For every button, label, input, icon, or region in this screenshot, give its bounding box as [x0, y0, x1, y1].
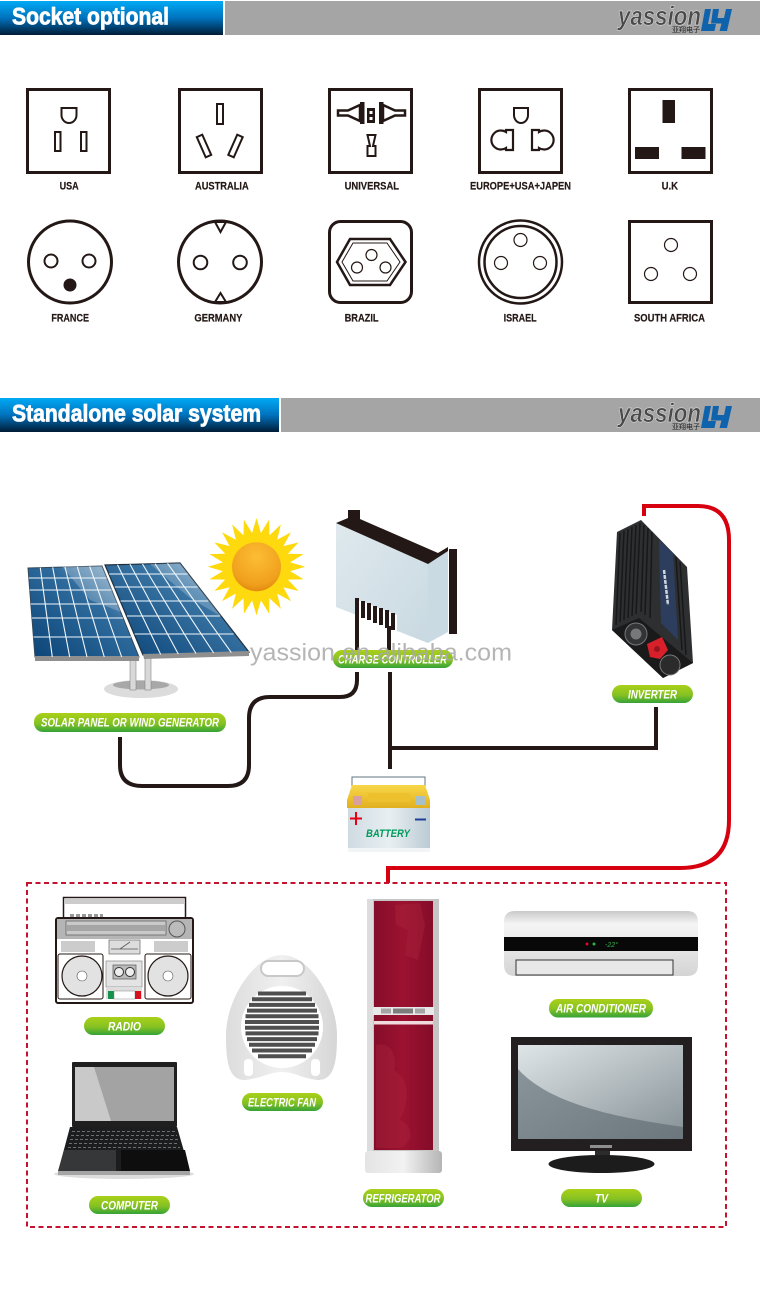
label: computer: COMPUTER — [101, 1200, 159, 1212]
panel: socket types row 2 — [28, 220, 712, 324]
label: computer — [89, 1196, 170, 1214]
socket: USA — [28, 90, 110, 192]
wire: controller to battery and inverter — [390, 672, 656, 769]
label: solar panel or wind generator — [34, 713, 226, 732]
icon: electric fan — [226, 955, 337, 1080]
label: refrigerator — [363, 1189, 444, 1207]
wire: solar panel to controller — [120, 672, 357, 786]
label: refrigerator: REFRIGERATOR — [366, 1194, 441, 1206]
socket: Australia — [180, 90, 262, 192]
icon: inverter — [612, 520, 693, 678]
icon: battery: BATTERY — [366, 828, 411, 840]
icon: air conditioner — [504, 911, 698, 976]
socket: France: FRANCE — [51, 312, 89, 324]
icon: sun — [208, 518, 305, 615]
icon: refrigerator — [365, 899, 442, 1173]
label: radio — [84, 1017, 165, 1035]
socket: Universal — [330, 90, 412, 192]
label: TV: TV — [595, 1194, 609, 1206]
socket: UK: U.K — [662, 180, 678, 192]
heading: socket optional: Socket optional — [12, 4, 169, 30]
socket: South Africa — [630, 222, 712, 324]
label: air conditioner — [549, 999, 653, 1018]
icon: TV — [511, 1037, 692, 1173]
socket: France — [28, 221, 112, 324]
logo: yassion: 亚翔电子 — [672, 25, 700, 34]
label: TV — [561, 1189, 642, 1207]
socket: Brazil — [330, 222, 412, 324]
header: standalone solar system — [0, 398, 760, 432]
icon: charge controller — [336, 510, 457, 650]
label: electric fan: ELECTRIC FAN — [248, 1098, 317, 1110]
socket: Germany: GERMANY — [194, 312, 243, 324]
panel: socket types row 1 — [28, 90, 712, 192]
socket: Israel: ISRAEL — [504, 312, 537, 324]
icon: air conditioner: -22° — [605, 941, 618, 949]
icon: battery — [347, 777, 430, 852]
logo: yassion second: 亚翔电子 — [672, 422, 700, 431]
heading: standalone solar system: Standalone solar system — [12, 400, 261, 428]
logo: yassion second: yassion — [616, 398, 701, 428]
watermark: yassion.en.alibaba.com: yassion.en.alibaba.com — [250, 640, 512, 666]
label: inverter: INVERTER — [628, 690, 678, 702]
label: charge controller: CHARGE CONTROLLER — [338, 654, 448, 666]
socket: USA: USA — [60, 180, 79, 192]
socket: Universal: UNIVERSAL — [345, 180, 399, 192]
socket: Brazil: BRAZIL — [345, 312, 379, 324]
socket: UK — [630, 90, 712, 192]
icon: laptop — [54, 1062, 194, 1179]
label: inverter — [612, 685, 693, 703]
socket: Europe USA Japan — [470, 90, 571, 192]
label: air conditioner: AIR CONDITIONER — [555, 1004, 647, 1016]
logo: yassion: yassion — [616, 1, 701, 31]
label: charge controller — [333, 650, 453, 668]
label: electric fan — [242, 1093, 323, 1111]
panel: loads dashed box — [27, 883, 726, 1227]
socket: Israel — [479, 220, 562, 324]
socket: Germany — [178, 221, 262, 324]
header: socket optional — [0, 1, 760, 35]
label: solar panel or wind generator: SOLAR PANEL OR WIND GENERATOR — [41, 718, 220, 730]
socket: Australia: AUSTRALIA — [195, 180, 249, 192]
icon: radio — [56, 898, 193, 1003]
icon: solar panels — [28, 563, 249, 698]
label: radio: RADIO — [108, 1022, 141, 1034]
socket: Europe USA Japan: EUROPE+USA+JAPEN — [470, 180, 571, 192]
socket: South Africa: SOUTH AFRICA — [634, 312, 705, 324]
wire: inverter to loads — [388, 506, 729, 883]
